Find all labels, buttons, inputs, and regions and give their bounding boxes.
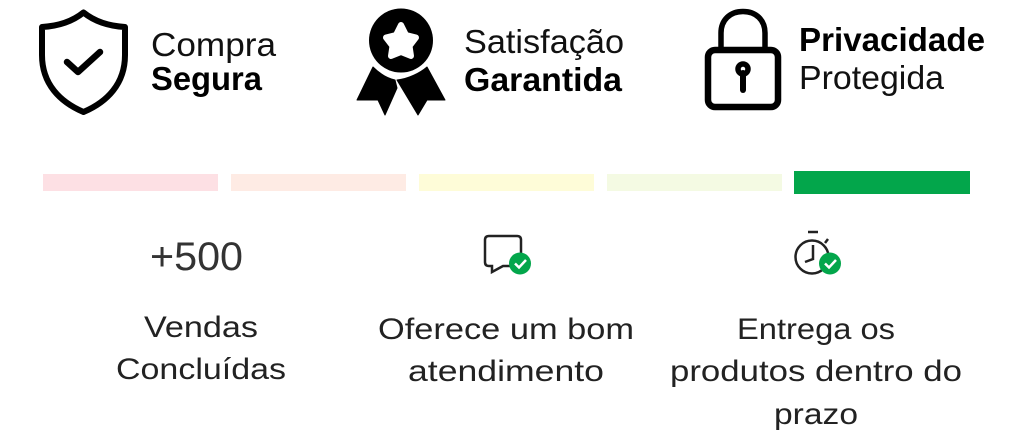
- text: good service: Oferece um bom: [378, 313, 634, 346]
- icon: padlock: [708, 12, 778, 107]
- text: delivers on time: Entrega os: [737, 313, 895, 346]
- text: satisfacao garantida: [464, 23, 624, 98]
- icon: award ribbon with star: [357, 8, 445, 115]
- metric: customer service: [378, 236, 634, 388]
- metric: sales: [116, 235, 286, 386]
- metric: sales: Vendas: [144, 311, 258, 344]
- rating scale bar: [43, 171, 970, 194]
- text: good service: atendimento: [408, 355, 604, 388]
- text: compra segura: Compra: [151, 26, 277, 63]
- text: delivers on time: prazo: [774, 398, 858, 431]
- icon: chat bubble with check: [485, 236, 531, 274]
- metric: sales: +500: [150, 235, 243, 279]
- badge: privacidade protegida: [708, 12, 985, 107]
- text: compra segura: [151, 26, 277, 97]
- text: privacidade protegida: Privacidade: [799, 21, 985, 58]
- badge: satisfacao garantida: [357, 8, 624, 115]
- text: good service: [378, 313, 634, 388]
- metric: delivery on time: [670, 232, 962, 431]
- metric: sales: Concluídas: [116, 353, 286, 386]
- text: privacidade protegida: Protegida: [799, 59, 945, 96]
- text: delivers on time: [670, 313, 962, 431]
- text: delivers on time: produtos dentro do: [670, 355, 962, 388]
- icon: shield with check: [42, 12, 125, 112]
- text: privacidade protegida: [799, 21, 985, 96]
- badge: compra segura: [42, 12, 277, 112]
- text: satisfacao garantida: Satisfação: [464, 23, 624, 60]
- text: compra segura: Segura: [151, 60, 263, 97]
- text: satisfacao garantida: Garantida: [464, 61, 623, 98]
- icon: stopwatch with check: [796, 232, 841, 274]
